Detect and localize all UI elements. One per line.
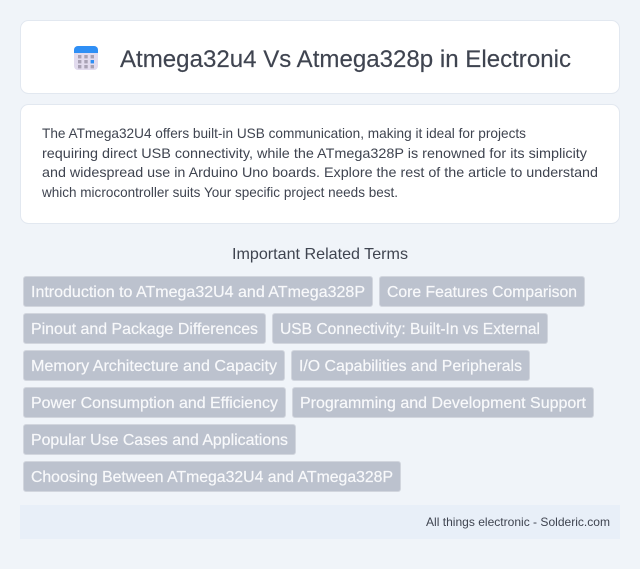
footer: [20, 505, 620, 539]
tag: usb connectivity: USB Connectivity: Built-In vs External: [280, 321, 540, 338]
tag: io: [292, 350, 530, 380]
tag: io: I/O Capabilities and Peripherals: [299, 358, 522, 375]
tag: introduction: [24, 276, 372, 306]
tag: memory: Memory Architecture and Capacity: [31, 358, 277, 375]
tag: introduction: Introduction to ATmega32U4 and ATmega328P: [31, 284, 365, 301]
text block: intro: [41, 125, 598, 200]
tag: memory: [24, 350, 284, 380]
tag list: [24, 276, 594, 492]
tag: pinout: [24, 314, 266, 344]
tag: programming: Programming and Development Support: [300, 395, 587, 412]
footer: All things electronic - Solderic.com: [426, 515, 610, 529]
tag: use cases: [24, 424, 296, 454]
tag: choosing: Choosing Between ATmega32U4 and ATmega328P: [31, 469, 393, 486]
tag: power: Power Consumption and Efficiency: [31, 395, 278, 412]
panel: intro paragraph: [20, 104, 620, 224]
icon: calendar: [74, 46, 98, 70]
title: Atmega32u4 Vs Atmega328p in Electronic: [120, 46, 571, 73]
tag: power: [24, 388, 286, 418]
text block: intro: requiring direct USB connectivity, while the ATmega328P is renowned for its simplicity: [42, 145, 587, 161]
text block: intro: and widespread use in Arduino Uno boards. Explore the rest of the article to understand: [42, 164, 598, 180]
tag: use cases: Popular Use Cases and Applications: [31, 432, 288, 449]
text block: intro: The ATmega32U4 offers built-in USB communication, making it ideal for projects: [42, 125, 526, 141]
tag: programming: [292, 388, 594, 418]
tag: core features: Core Features Comparison: [387, 284, 577, 301]
text block: intro: which microcontroller suits Your specific project needs best.: [41, 184, 398, 200]
tag: core features: [380, 276, 584, 306]
tag: choosing: [24, 462, 400, 492]
tag: pinout: Pinout and Package Differences: [31, 321, 258, 338]
tag: usb connectivity: [272, 314, 548, 344]
heading: related terms: Important Related Terms: [232, 246, 408, 263]
panel: header: [20, 20, 620, 94]
